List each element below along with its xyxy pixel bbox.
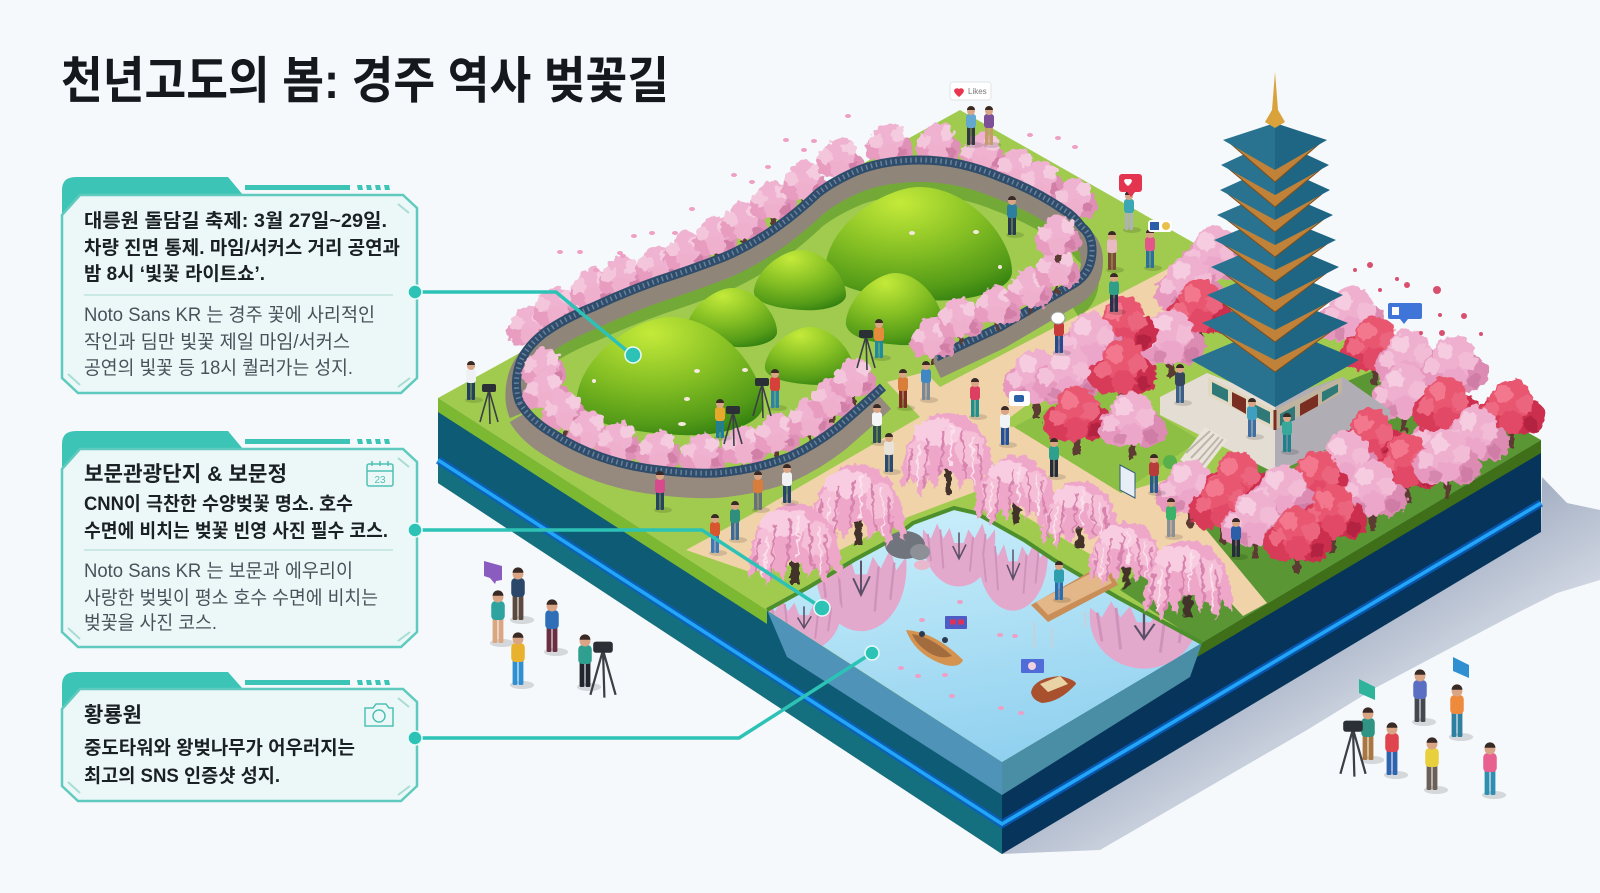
cherry trees behind the pagoda xyxy=(1057,226,1488,433)
sand paths xyxy=(686,250,1267,616)
detail text: 공연의 빛꽃 등 18시 퀄러가는 성지. xyxy=(84,357,353,379)
icon: calendar: 23 xyxy=(374,475,386,486)
dark lawn near the pagoda xyxy=(1120,360,1541,643)
enclosure shade on the grass xyxy=(544,188,1092,361)
panel tab xyxy=(62,177,243,216)
stone terrace xyxy=(1160,373,1390,473)
tripod xyxy=(590,642,616,698)
bold summary text: 밤 8시 ‘빛꽃 라이트쇼’. xyxy=(84,263,265,285)
panel: Daereungwon festival xyxy=(62,177,417,393)
icon: calendar xyxy=(367,461,393,486)
panel heading: 황룡원 xyxy=(84,704,142,727)
purple bubble xyxy=(484,561,502,584)
detail text: Noto Sans KR 는 경주 꽃에 사리적인 xyxy=(84,304,375,326)
bold summary text xyxy=(84,210,400,285)
icon: camera xyxy=(365,704,393,726)
bold summary text: 중도타워와 왕벚나무가 어우러지는 xyxy=(84,737,355,759)
stone wall, rear section xyxy=(516,160,1092,414)
grass top surface xyxy=(438,110,1541,762)
detail text: 작인과 딤만 빛꽃 제일 마임/서커스 xyxy=(84,331,350,353)
bold summary text: 대릉원 돌담길 축제: 3월 27일~29일. xyxy=(84,210,387,232)
golden spire xyxy=(1265,72,1285,128)
detail text xyxy=(84,304,375,379)
social media bubbles on the park xyxy=(945,82,1422,673)
bold summary text xyxy=(84,493,388,542)
wooden dock xyxy=(1031,563,1118,648)
panel: Bomun tourist complex xyxy=(62,431,417,647)
lawn by the pagoda xyxy=(1014,380,1200,493)
floating petals xyxy=(898,600,1024,715)
falling petals around the diorama xyxy=(557,114,1483,336)
white comment bubble xyxy=(1009,391,1030,406)
blue bubble on lake xyxy=(1021,659,1044,673)
info sign and bush xyxy=(1120,455,1177,498)
detail text: 사랑한 벚빛이 평소 호수 수면에 비치는 xyxy=(84,587,378,609)
title: 천년고도의 봄: 경주 역사 벚꽃길 xyxy=(61,53,669,109)
cherry trees around the pagoda xyxy=(1002,339,1545,575)
connector: panel 1 to tomb mound xyxy=(408,285,641,363)
purple bubble on lake xyxy=(945,616,967,629)
thumbs up bubble xyxy=(1388,303,1422,324)
ground shadow of the diorama xyxy=(1002,477,1600,854)
cherry trees behind the wall xyxy=(507,123,1098,352)
isometric park diorama xyxy=(438,72,1545,854)
shoreline xyxy=(767,508,1202,643)
pagoda ground hall xyxy=(1208,377,1342,430)
rocks xyxy=(885,531,930,570)
detail text: Noto Sans KR 는 보문과 에우리이 xyxy=(84,560,353,582)
connector: panel 3 to lake xyxy=(408,646,879,745)
white petals on the mounds xyxy=(592,230,1002,426)
outside visitors group, left xyxy=(484,561,616,698)
panel tab xyxy=(62,431,243,470)
cherry trees along the inner wall xyxy=(521,215,1081,479)
blue emoji bubble xyxy=(1148,220,1172,232)
tree reflections xyxy=(767,524,1198,669)
pagoda xyxy=(1160,72,1390,473)
bold summary text: 수면에 비치는 벚꽃 빈영 사진 필수 코스. xyxy=(84,520,388,542)
pagoda roof tiers xyxy=(1191,123,1359,407)
motor boat xyxy=(1031,676,1076,703)
panel tab xyxy=(62,672,243,710)
outside visitors group, right xyxy=(1340,657,1506,799)
connector: panel 2 to lake reflection xyxy=(408,523,830,616)
panel heading: 보문관광단지 & 보문정 xyxy=(84,463,287,486)
red heart bubble xyxy=(1119,174,1142,197)
royal tomb mounds xyxy=(577,187,1012,435)
white speech bubble xyxy=(1051,312,1065,324)
bold summary text: 차량 진면 통제. 마임/서커스 거리 공연과 xyxy=(84,237,400,259)
weeping cherry trees xyxy=(749,413,1232,620)
detail text: 벚꽃을 사진 코스. xyxy=(84,612,217,634)
blue bubble xyxy=(1453,657,1469,678)
lake surface xyxy=(767,508,1202,762)
rowboat xyxy=(906,630,963,666)
likes bubble: Likes xyxy=(968,87,987,96)
likes bubble xyxy=(950,82,991,100)
visitors on the park xyxy=(465,106,1299,603)
bold summary text: 최고의 SNS 인증샷 성지. xyxy=(84,765,280,787)
panel: Hwangnyongwon xyxy=(62,672,417,801)
green bubble xyxy=(1359,679,1375,700)
detail text xyxy=(84,560,378,634)
platform sides xyxy=(438,398,1541,854)
bold summary text: CNN이 극찬한 수양벚꽃 명소. 호수 xyxy=(84,493,353,515)
stone wall, front section xyxy=(520,387,883,486)
bold summary text xyxy=(84,737,355,787)
